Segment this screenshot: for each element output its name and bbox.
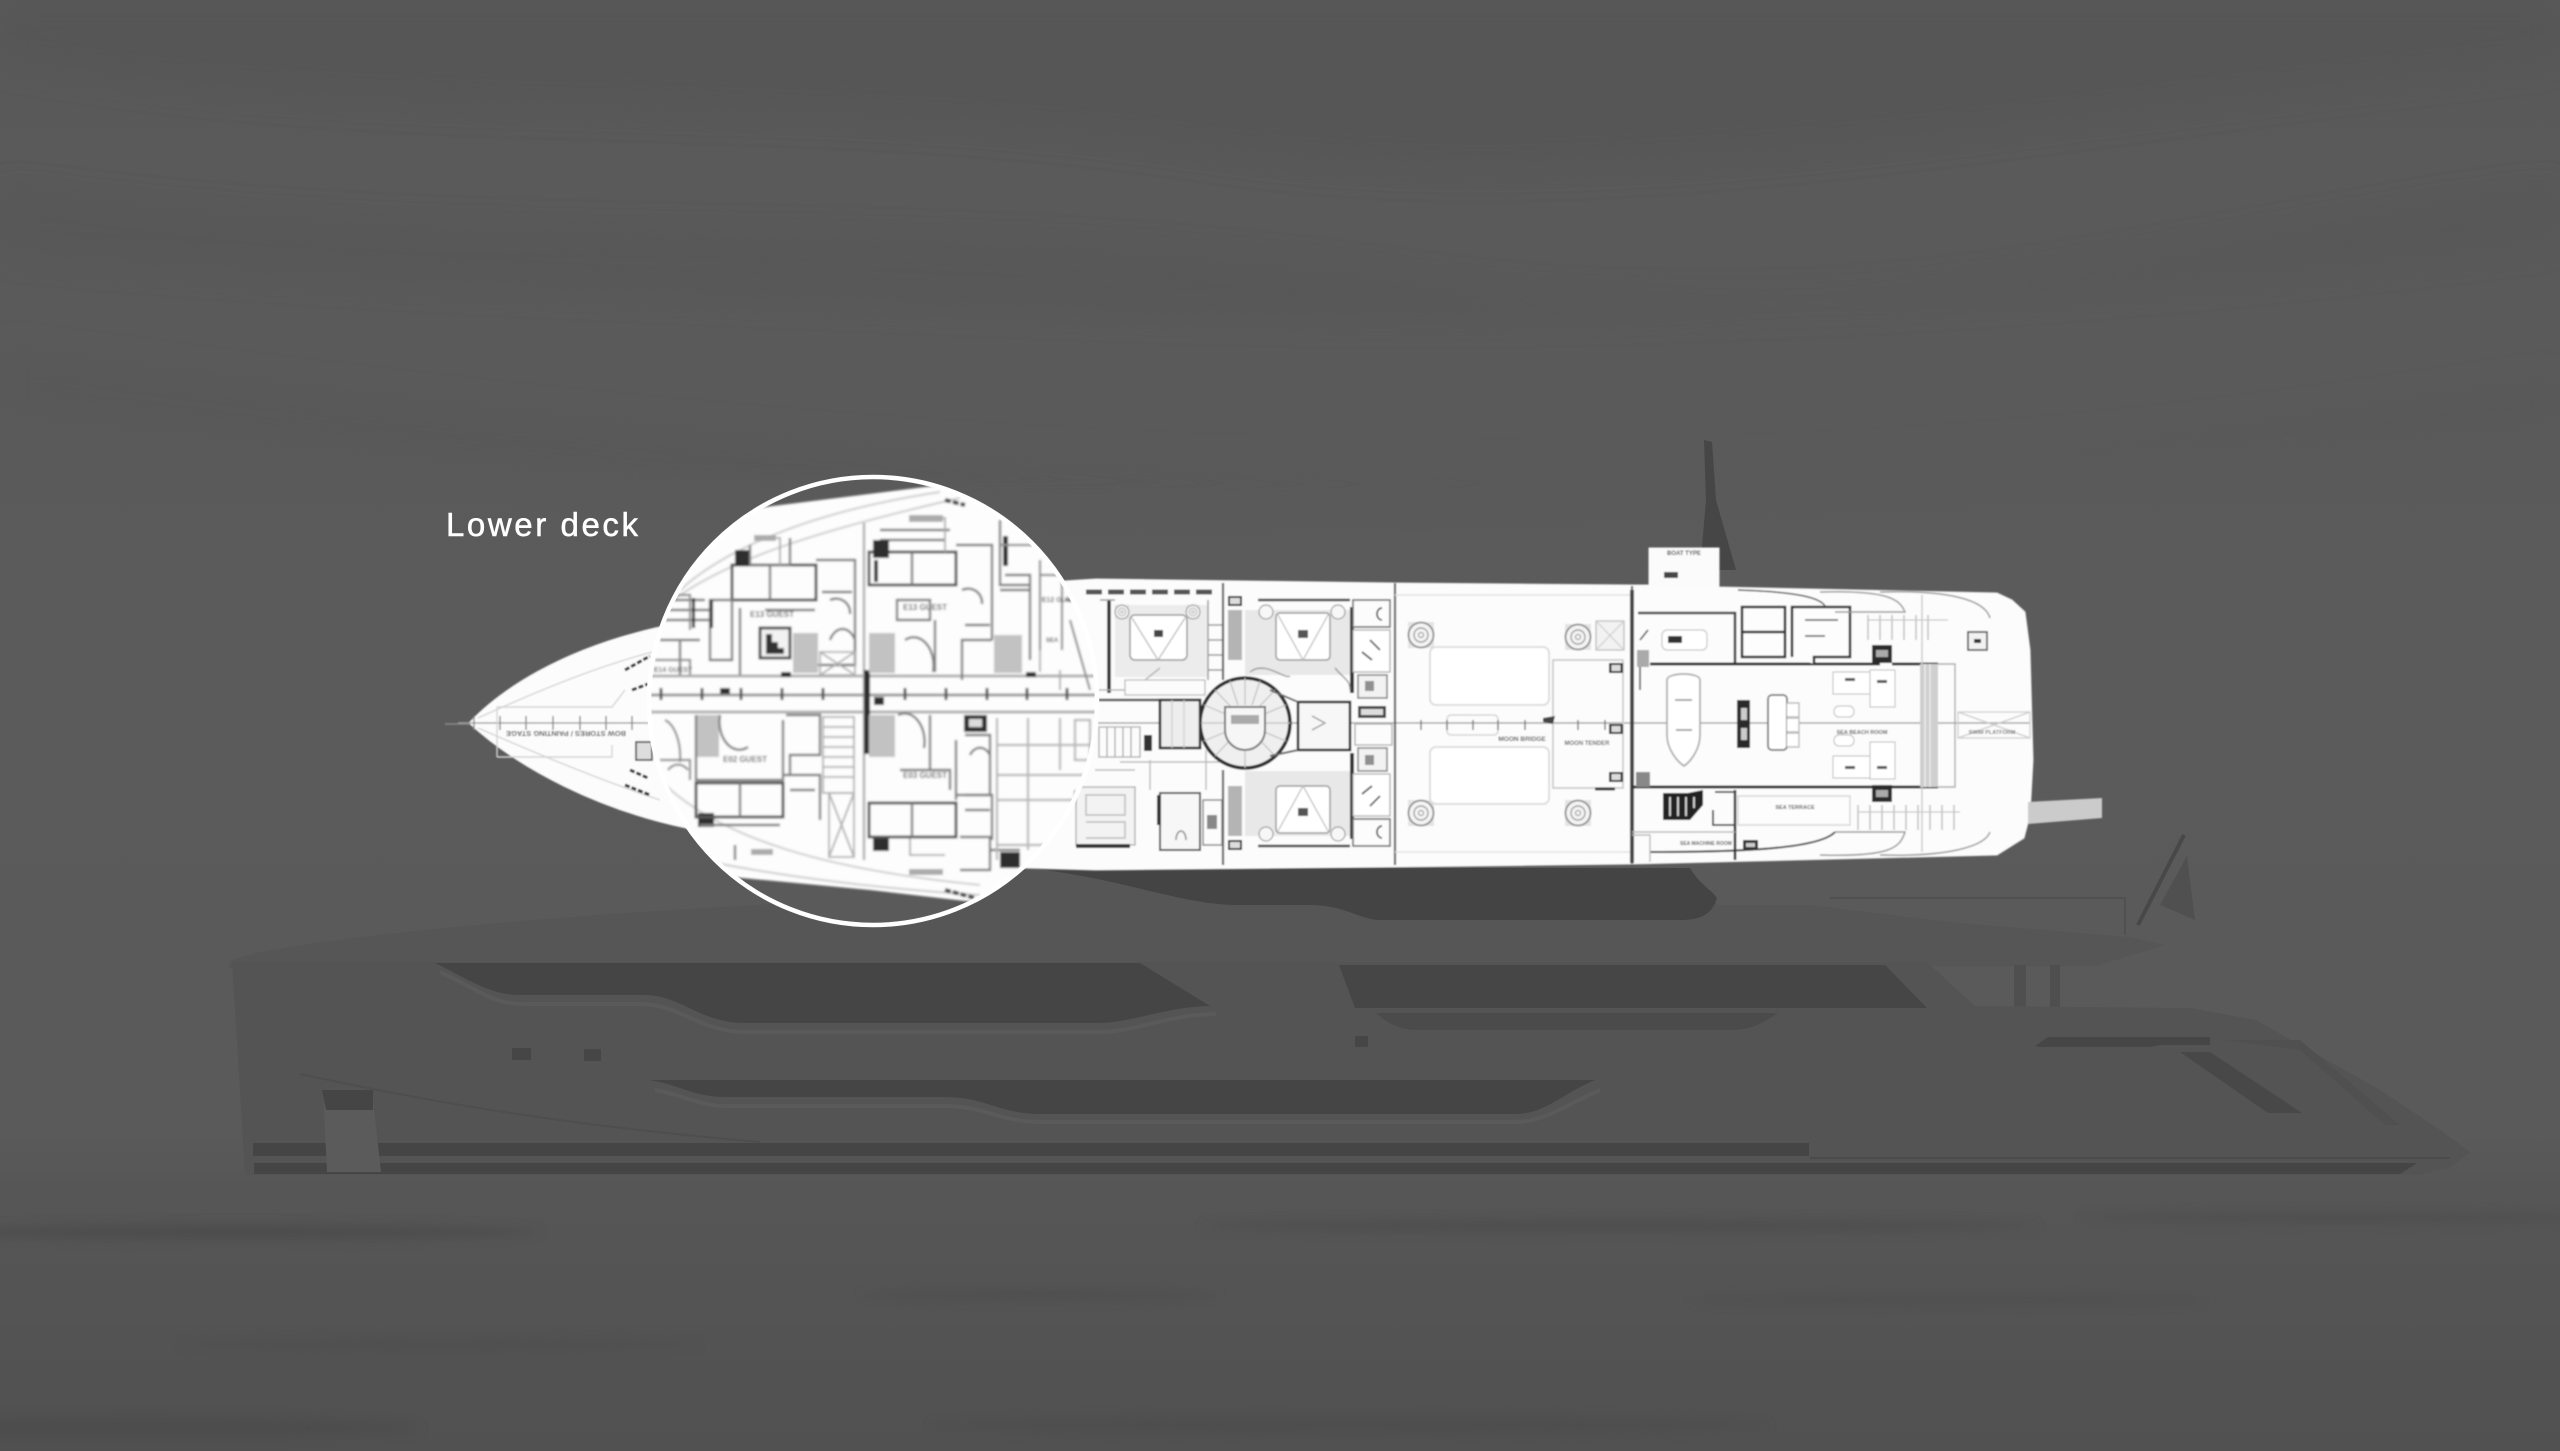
bulkhead bbox=[863, 523, 865, 860]
main hull bbox=[232, 962, 2470, 1175]
upper left cabin bbox=[660, 538, 855, 675]
yacht side profile in the background bbox=[229, 440, 2470, 1175]
central stair bbox=[820, 652, 855, 857]
hull stripes at waterline bbox=[253, 1143, 2417, 1174]
lens ring bbox=[649, 477, 1097, 925]
main deck dark glazing aft bbox=[1339, 965, 1927, 1008]
infographic canvas bbox=[0, 440, 2560, 1451]
hull curve lines bbox=[660, 492, 980, 895]
lens edge labels bbox=[945, 500, 975, 898]
stern garage and beach club bbox=[1632, 548, 2030, 863]
helipad / moon bridge deck bbox=[1395, 595, 1632, 852]
lounge sofa bbox=[1768, 695, 1787, 750]
tender rooms lower bbox=[1738, 796, 1850, 825]
bow stores label: BOW STORES / PAINTING STAGE bbox=[506, 729, 626, 738]
bottom left machinery bbox=[1640, 630, 1648, 690]
upper superstructure bbox=[229, 868, 2165, 968]
forward guest cabins (mid deck) bbox=[1076, 592, 1222, 850]
cabin door arcs bbox=[1250, 668, 1350, 690]
garage walls bbox=[1632, 664, 1938, 787]
forward locker row bbox=[752, 516, 1060, 874]
forward side details bbox=[655, 545, 1096, 780]
aft platform X brace bbox=[1958, 712, 2030, 738]
island unit bbox=[1737, 700, 1750, 748]
corridor bbox=[650, 676, 1096, 712]
circular staircase lobby bbox=[1160, 678, 1392, 768]
centre line bbox=[458, 722, 2030, 724]
dark fixtures bbox=[698, 536, 1036, 868]
heading: Lower deck: Lower deck bbox=[446, 506, 638, 543]
bow side labels bbox=[625, 656, 650, 795]
VIP suites, upper half and mirrored lower half bbox=[1228, 596, 1390, 698]
stairwell lower left bbox=[1663, 790, 1703, 820]
flag and flagstaff bbox=[2138, 835, 2195, 925]
stern door strut bbox=[323, 1090, 381, 1172]
lower right cabin label: E03 GUEST bbox=[903, 771, 947, 780]
aft deck railing bbox=[1830, 898, 2125, 935]
tender bay detail bbox=[2035, 1037, 2210, 1047]
tender boat bbox=[1667, 674, 1700, 766]
aft platform label: SWIM PLATFORM bbox=[1969, 730, 2016, 736]
magnifier lens: enlarged forward cabins: E12 GUEST bbox=[1042, 597, 1081, 604]
corridor frame ticks bbox=[661, 688, 1067, 700]
aft deck pillars bbox=[2014, 965, 2060, 1012]
stern square hatch bbox=[1968, 632, 1987, 650]
moon tender label: MOON TENDER bbox=[1564, 741, 1610, 747]
lift shaft bbox=[760, 628, 790, 658]
stern garage and beach club: SEA TERRACE bbox=[1775, 805, 1815, 811]
lower left cabin label: E02 GUEST bbox=[723, 755, 767, 764]
bow label frame bbox=[636, 742, 652, 760]
hull portholes bbox=[512, 1036, 1368, 1061]
hatch panels bbox=[696, 633, 1022, 757]
hull waterline bbox=[1810, 1157, 2450, 1159]
stern garage and beach club: SEA MACHINE ROOM bbox=[1680, 841, 1732, 847]
lower right cabin bbox=[869, 713, 1020, 870]
deck plan drawing bbox=[445, 548, 2102, 870]
bow tick marks bbox=[474, 716, 632, 730]
tender top deck tab bbox=[1649, 548, 1719, 586]
moon bridge label: MOON BRIDGE bbox=[1498, 736, 1546, 743]
magnifier lens: enlarged forward cabins: SEA bbox=[1046, 638, 1059, 644]
upper left cabin label: E13 GUEST bbox=[750, 610, 794, 619]
upper saloon dark glazing bbox=[1030, 868, 1717, 920]
right side locker grid bbox=[997, 718, 1096, 860]
enlarged hull white area bbox=[651, 486, 1095, 902]
mast and radar behind deck plan bbox=[1700, 440, 1736, 570]
bow hull and main deck outline bbox=[469, 548, 2033, 870]
black equipment units bbox=[1872, 645, 1892, 663]
beach club label: SEA BEACH ROOM bbox=[1837, 730, 1888, 736]
beach club daybeds bbox=[1833, 672, 1870, 694]
upper right cabin label: E13 GUEST bbox=[903, 603, 947, 612]
window rim highlights bbox=[440, 972, 1600, 1122]
stern gangway bbox=[2028, 798, 2102, 824]
foredeck window bbox=[2180, 1052, 2302, 1113]
main deck dark glazing forward bbox=[435, 963, 1210, 1023]
bow compartment bbox=[445, 650, 660, 800]
bow stem cap bbox=[445, 723, 470, 725]
tab label: BOAT TYPE bbox=[1667, 551, 1701, 557]
central black pillar bbox=[864, 670, 870, 754]
forward service rooms bbox=[1742, 607, 1785, 657]
side hull trims bbox=[1820, 592, 1990, 618]
lower left cabin bbox=[696, 715, 820, 860]
upper right cabin bbox=[869, 520, 1030, 680]
small lens labels: E14 GUEST bbox=[654, 667, 693, 674]
bulkheads bbox=[1223, 583, 1632, 865]
magnifier lens: enlarged forward cabins bbox=[640, 470, 1110, 940]
lower hull window bbox=[649, 1080, 1595, 1114]
lower window strip bbox=[1376, 1013, 1778, 1030]
swim steps bbox=[1920, 664, 1938, 787]
